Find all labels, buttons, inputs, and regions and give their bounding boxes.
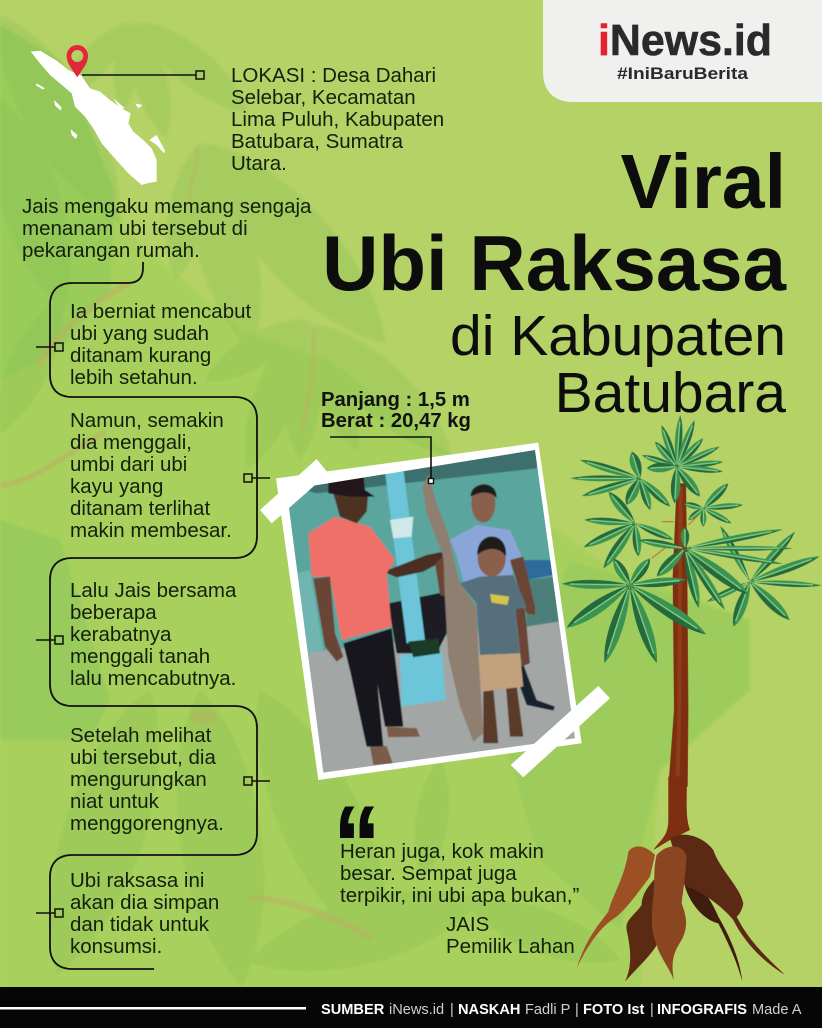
step 3 text: Lalu Jais bersama bbox=[70, 579, 237, 602]
step 4 text: menggorengnya. bbox=[70, 812, 224, 835]
step 1 text: lebih setahun. bbox=[70, 366, 198, 389]
tuber centre bbox=[652, 846, 687, 980]
step 2 text: dia menggali, bbox=[70, 431, 192, 454]
quote text: Heran juga, kok makin bbox=[340, 840, 544, 863]
footer credits: iNews.id bbox=[389, 1002, 444, 1018]
intro text: menanam ubi tersebut di bbox=[22, 217, 248, 240]
step 3 text: menggali tanah bbox=[70, 645, 210, 668]
step 1 text: ubi yang sudah bbox=[70, 322, 209, 345]
photo frame bbox=[276, 442, 582, 780]
footer credits: | bbox=[450, 1002, 454, 1018]
leaf cluster E bbox=[582, 489, 675, 571]
step 5 text: dan tidak untuk bbox=[70, 913, 210, 936]
footer credits: Fadli P bbox=[525, 1002, 570, 1018]
leaf cluster C bbox=[706, 524, 822, 629]
dimensions pointer bbox=[330, 437, 434, 484]
location connector bbox=[82, 71, 204, 79]
intro text: pekarangan rumah. bbox=[22, 239, 200, 262]
leaf cluster B bbox=[638, 526, 793, 612]
footer credits: NASKAH bbox=[458, 1002, 520, 1018]
dimensions text: Panjang : 1,5 m bbox=[321, 389, 470, 411]
map: Sumatra with pin bbox=[31, 45, 165, 185]
intro text: Jais mengaku memang sengaja bbox=[22, 195, 312, 218]
dimensions text: Berat : 20,47 kg bbox=[321, 410, 471, 432]
icon: location pin bbox=[67, 45, 88, 77]
step 3 text: beberapa bbox=[70, 601, 157, 624]
tuber back left bbox=[625, 873, 660, 982]
footer credits: FOTO Ist bbox=[583, 1002, 644, 1018]
tuber right bbox=[670, 835, 785, 975]
step 4 text: niat untuk bbox=[70, 790, 160, 813]
orange petioles bbox=[652, 517, 728, 577]
location text: Selebar, Kecamatan bbox=[231, 86, 416, 109]
footer credits: Made A bbox=[752, 1002, 802, 1018]
step 2 text: kayu yang bbox=[70, 475, 163, 498]
title: Ubi Raksasa bbox=[322, 219, 787, 307]
photo scene bbox=[289, 450, 575, 772]
title: di Kabupaten bbox=[450, 304, 786, 368]
step 1 text: Ia berniat mencabut bbox=[70, 300, 252, 323]
step 1 text: ditanam kurang bbox=[70, 344, 211, 367]
tape strips bbox=[260, 459, 610, 777]
quote text: terpikir, ini ubi apa bukan,” bbox=[340, 884, 579, 907]
step 2 text: Namun, semakin bbox=[70, 409, 224, 432]
location text: Utara. bbox=[231, 152, 287, 175]
plant stem bbox=[668, 483, 688, 787]
leaf cluster G bbox=[683, 480, 743, 527]
tuber left bbox=[577, 846, 655, 968]
leaf cluster F bbox=[641, 415, 724, 504]
timeline connector line bbox=[50, 262, 257, 969]
step 5 text: Ubi raksasa ini bbox=[70, 869, 204, 892]
person: man in blue shirt bbox=[450, 484, 555, 711]
tuber back right bbox=[685, 883, 742, 982]
person: boy bbox=[435, 536, 530, 743]
person: man in pink shirt bbox=[308, 475, 443, 765]
step 4 text: ubi tersebut, dia bbox=[70, 746, 216, 769]
leaf cluster D bbox=[570, 450, 673, 511]
logo wordmark: iNews.id bbox=[598, 16, 772, 65]
icon: quotation mark: “ bbox=[334, 785, 380, 904]
step 2 text: ditanam terlihat bbox=[70, 497, 210, 520]
quote text: besar. Sempat juga bbox=[340, 862, 517, 885]
footer credits: SUMBER bbox=[321, 1002, 385, 1018]
footer credits: | bbox=[650, 1002, 654, 1018]
step 2 text: umbi dari ubi bbox=[70, 453, 187, 476]
step 4 text: mengurungkan bbox=[70, 768, 207, 791]
step 3 text: kerabatnya bbox=[70, 623, 172, 646]
cassava stem lower and tubers bbox=[577, 777, 785, 982]
title: Viral bbox=[620, 139, 786, 225]
logo panel bbox=[543, 0, 822, 102]
title: Batubara bbox=[555, 361, 786, 425]
step 4 text: Setelah melihat bbox=[70, 724, 212, 747]
title bbox=[322, 139, 787, 425]
quote attribution: JAIS bbox=[446, 913, 489, 936]
location text: LOKASI : Desa Dahari bbox=[231, 64, 436, 87]
quote attribution: Pemilik Lahan bbox=[446, 935, 575, 958]
footer bar bbox=[0, 987, 822, 1028]
giant cassava tuber bbox=[422, 475, 483, 742]
step 2 text: makin membesar. bbox=[70, 519, 232, 542]
footer credits: INFOGRAFIS bbox=[657, 1002, 747, 1018]
leaf cluster A bbox=[562, 555, 710, 665]
cassava plant bbox=[562, 415, 822, 787]
timeline tick markers bbox=[36, 343, 270, 917]
footer credits: | bbox=[575, 1002, 579, 1018]
step 5 text: konsumsi. bbox=[70, 935, 162, 958]
location text: Lima Puluh, Kabupaten bbox=[231, 108, 444, 131]
location text: Batubara, Sumatra bbox=[231, 130, 404, 153]
step 5 text: akan dia simpan bbox=[70, 891, 219, 914]
step 3 text: lalu mencabutnya. bbox=[70, 667, 236, 690]
logo tagline: #IniBaruBerita bbox=[617, 65, 749, 83]
